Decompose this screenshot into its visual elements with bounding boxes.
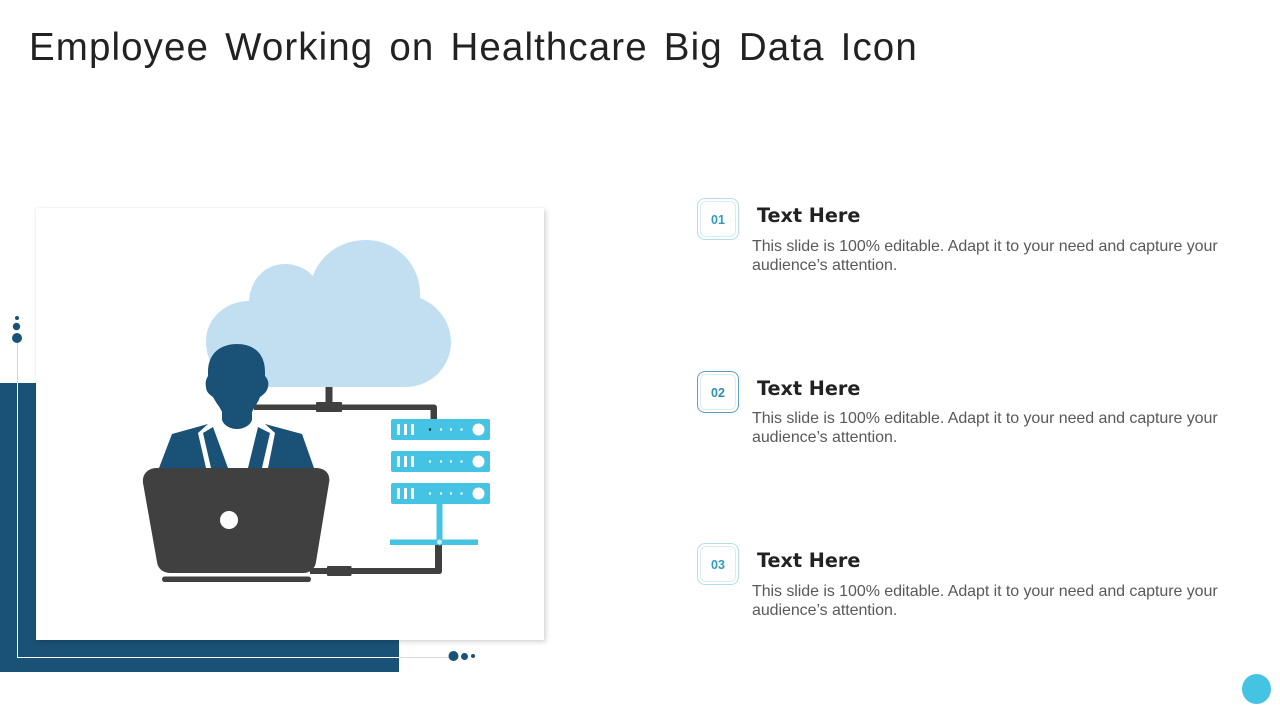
description 01: audience’s attention. <box>752 257 897 274</box>
badge 03 <box>697 543 739 585</box>
description 02: This slide is 100% editable. Adapt it to your need and capture your <box>752 410 1218 427</box>
description 03: audience’s attention. <box>752 602 897 619</box>
icon: laptop <box>143 468 329 582</box>
list item 02 <box>697 371 1218 446</box>
badge 03: 03 <box>711 558 725 572</box>
heading 01: Text Here <box>757 204 860 227</box>
description 03 <box>752 583 1218 619</box>
description 03: This slide is 100% editable. Adapt it to your need and capture your <box>752 583 1218 600</box>
badge 01: 01 <box>711 213 725 227</box>
badge 02 <box>697 371 739 413</box>
heading 02: Text Here <box>757 377 860 400</box>
description 02: audience’s attention. <box>752 429 897 446</box>
icon: cloud network cable <box>254 387 437 420</box>
list item 01 <box>697 198 1218 274</box>
description 01: This slide is 100% editable. Adapt it to your need and capture your <box>752 238 1218 255</box>
badge 01 <box>697 198 739 240</box>
decorative corner circle <box>1242 674 1271 704</box>
description 01 <box>752 238 1218 274</box>
icon: cloud <box>206 240 451 387</box>
list item 03 <box>697 543 1218 619</box>
badge 02: 02 <box>711 386 725 400</box>
description 02 <box>752 410 1218 446</box>
icon: employee <box>159 344 314 468</box>
icon: laptop cable <box>310 539 442 576</box>
title: Employee Working on Healthcare Big Data Icon <box>29 26 918 69</box>
icon: server stack <box>390 419 490 545</box>
heading 03: Text Here <box>757 549 860 572</box>
panel: illustration card <box>36 208 544 640</box>
